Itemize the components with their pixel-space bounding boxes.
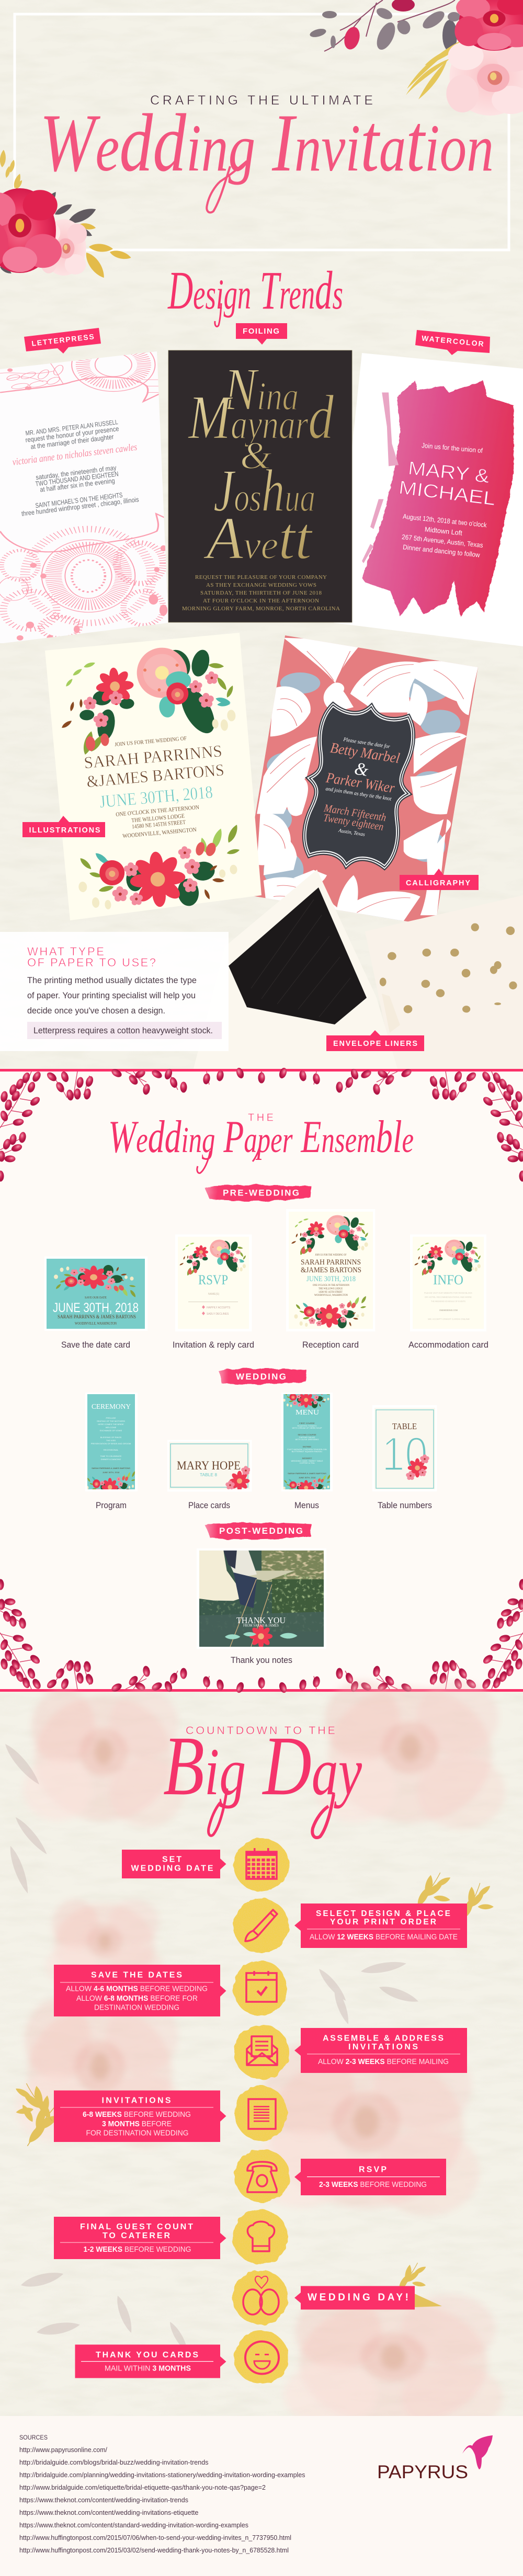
step 8: wedding day bbox=[232, 2270, 415, 2324]
card: accommodation: INFO bbox=[433, 1272, 463, 1287]
garland: top bbox=[0, 1067, 523, 1182]
icon: calendar bbox=[246, 1848, 277, 1879]
step 5: invitations: FOR DESTINATION WEDDING bbox=[86, 2128, 188, 2138]
card: letterpress: TWO THOUSAND AND EIGHTEEN bbox=[35, 470, 119, 488]
title: wedding invitation: Wedding Invitation bbox=[40, 97, 494, 189]
card: watercolor bbox=[334, 353, 523, 646]
label: illustrations bbox=[22, 816, 105, 837]
card: program: PRESENTATION OF BRIDE AND GROOM bbox=[91, 1442, 131, 1445]
badge: wedding: WEDDING bbox=[236, 1372, 286, 1382]
captions: wedding: Place cards bbox=[188, 1500, 230, 1510]
step 2: select design bbox=[233, 1898, 467, 1953]
panel heading bbox=[27, 945, 156, 969]
card: save the date: JUNE 30TH, 2018 bbox=[53, 1301, 139, 1315]
card: reception: SARAH PARRINNS bbox=[301, 1258, 361, 1267]
card: illustrations: WOODINVILLE, WASHINGTON bbox=[122, 827, 197, 839]
card: save the date: WOODINVILLE, WASHINGTON bbox=[75, 1321, 117, 1326]
card: program bbox=[85, 1393, 138, 1497]
card: program: CEREMONY bbox=[92, 1403, 131, 1411]
captions: pre-wedding: Save the date card bbox=[61, 1340, 130, 1350]
card: reception: 14580 NE 145TH STREET bbox=[319, 1291, 343, 1294]
garland: bottom bbox=[0, 1579, 523, 1694]
caption: thank you notes: Thank you notes bbox=[231, 1655, 292, 1665]
card: invitation and reply: SADLY DECLINES bbox=[207, 1313, 229, 1316]
card: letterpress: three hundred winthrop street , chicago, illinois bbox=[21, 495, 140, 518]
heading: the: THE bbox=[248, 1112, 274, 1123]
card: letterpress: at half after six in the evening bbox=[40, 476, 115, 494]
heading: wedding paper ensemble: Wedding Paper Ensemble bbox=[108, 1112, 414, 1162]
card: program: BLESSING OF RINGS bbox=[100, 1436, 122, 1439]
icon: chef hat bbox=[247, 2221, 275, 2251]
card: foiling: AT FOUR O'CLOCK IN THE AFTERNOON bbox=[203, 598, 319, 604]
card: watercolor: MICHAEL bbox=[397, 476, 497, 509]
card: menus bbox=[281, 1386, 333, 1496]
card: accommodation: ONEWEDDING.COM bbox=[439, 1309, 458, 1312]
card: watercolor: August 12th, 2018 at two o'clock bbox=[403, 512, 487, 529]
step 7: final guest count bbox=[54, 2210, 288, 2264]
step 6: rsvp: 2-3 WEEKS BEFORE WEDDING bbox=[319, 2180, 427, 2189]
card: reception: JUNE 30TH, 2018 bbox=[306, 1275, 356, 1283]
step 2: select design: SELECT DESIGN & PLACE bbox=[316, 1909, 450, 1918]
card: thank you photo: THANK YOU bbox=[236, 1615, 286, 1625]
panel body text: of paper. Your printing specialist will help you bbox=[27, 990, 196, 1000]
card: menus: WITH CREAM OF HERB SOUP bbox=[292, 1427, 322, 1429]
card: reception: WOODINVILLE, WASHINGTON bbox=[314, 1294, 348, 1297]
card: watercolor: Dinner and dancing to follow bbox=[403, 543, 481, 559]
card: calligraphy bbox=[242, 635, 478, 929]
small heading: crafting the ultimate: CRAFTING THE ULTIMATE bbox=[150, 93, 373, 108]
sources list: http://bridalguide.com/planning/wedding-invitations-stationery/wedding-invitation-wording-examples bbox=[19, 2471, 305, 2479]
step 9: thank you cards: THANK YOU CARDS bbox=[96, 2351, 198, 2360]
card: table numbers bbox=[372, 1405, 437, 1491]
heading: design trends: Design Trends bbox=[167, 260, 343, 321]
card: reception: &JAMES BARTONS bbox=[301, 1266, 361, 1274]
captions: wedding: Menus bbox=[294, 1500, 319, 1510]
step 3: save the dates bbox=[54, 1961, 287, 2016]
panel callout bbox=[27, 1022, 222, 1039]
card: save the date: SAVE OUR DATE bbox=[85, 1296, 107, 1300]
icon: document bbox=[248, 2099, 276, 2129]
card: program: SARAH PARRINNS & JAMES BARTONS bbox=[92, 1467, 130, 1469]
header frame bbox=[15, 14, 509, 250]
icon: telephone bbox=[247, 2162, 277, 2192]
card: foiling: SATURDAY, THE THIRTIETH OF JUNE 2018 bbox=[200, 590, 322, 596]
captions: pre-wedding: Invitation & reply card bbox=[173, 1340, 254, 1350]
step 3: save the dates: SAVE THE DATES bbox=[91, 1970, 182, 1980]
captions: pre-wedding bbox=[61, 1340, 488, 1350]
logo: papyrus: PAPYRUS bbox=[377, 2462, 468, 2482]
card: menus: WEDDING CAKE, SWEET TABLE bbox=[291, 1460, 323, 1462]
card: menus: CAESAR SALAD bbox=[299, 1436, 315, 1439]
card: foiling: Maynard bbox=[187, 382, 334, 452]
card: program: JUNE 30TH, 2018 bbox=[103, 1471, 120, 1474]
card: reception: JOIN US FOR THE WEDDING OF bbox=[315, 1254, 347, 1257]
card: place cards: MARY HOPE bbox=[177, 1459, 241, 1472]
card: invitation and reply bbox=[175, 1234, 252, 1331]
label: letterpress: LETTERPRESS bbox=[31, 332, 95, 348]
card: letterpress: MR. AND MRS. PETER ALAN RUSSELL bbox=[25, 418, 118, 437]
sources list: SOURCES bbox=[19, 2434, 48, 2441]
panel callout: Letterpress requires a cotton heavyweight stock. bbox=[33, 1025, 213, 1035]
card: calligraphy: Twenty eighteen bbox=[323, 811, 384, 833]
section: wedding paper ensemble bbox=[0, 1067, 523, 1694]
card: illustrations: JOIN US FOR THE WEDDING OF bbox=[115, 736, 187, 748]
card: menus: COFFEE & TEA bbox=[300, 1462, 315, 1464]
step 9: thank you cards: MAIL WITHIN 3 MONTHS bbox=[105, 2364, 191, 2373]
panel body text: decide once you've chosen a design. bbox=[27, 1006, 165, 1016]
card: letterpress: at the marriage of their daughter bbox=[30, 432, 115, 451]
card: program: EXCHANGE OF VOWS bbox=[100, 1429, 122, 1432]
card: invitation and reply: HAPPILY ACCEPTS bbox=[207, 1306, 231, 1309]
card: calligraphy: and join them as they tie the knot bbox=[325, 786, 392, 802]
sources list: https://www.theknot.com/content/standard-wedding-invitation-wording-examples bbox=[19, 2522, 248, 2529]
step 1: set wedding date bbox=[122, 1838, 289, 1891]
step 7: final guest count: 1-2 WEEKS BEFORE WEDDING bbox=[84, 2245, 191, 2254]
card: accommodation bbox=[410, 1234, 486, 1331]
card: illustrations bbox=[45, 633, 262, 920]
label: calligraphy: CALLIGRAPHY bbox=[406, 879, 470, 887]
captions: pre-wedding: Accommodation card bbox=[408, 1340, 488, 1350]
card: calligraphy: Parker Wiker bbox=[324, 770, 396, 796]
card: letterpress: saturday, the nineteenth of may bbox=[36, 464, 117, 481]
card: program: WELCOME bbox=[106, 1426, 117, 1429]
card: invitation and reply: NAME(S) bbox=[208, 1293, 219, 1296]
card: accommodation: THE WEEKEND SCHEDULE OF EVENTS bbox=[431, 1300, 465, 1303]
card: calligraphy: Betty Marbel bbox=[329, 740, 401, 767]
card: menus: SARAH PARRINNS & JAMES BARTONS bbox=[288, 1472, 326, 1475]
card: letterpress: request the honour of your presence bbox=[25, 425, 119, 444]
panel body text bbox=[27, 975, 197, 1016]
icon: smiley bbox=[245, 2342, 279, 2374]
badge: pre-wedding bbox=[205, 1185, 312, 1201]
captions: wedding: Table numbers bbox=[378, 1500, 432, 1510]
captions: wedding: Program bbox=[96, 1500, 127, 1510]
card: accommodation: PLEASE VISIT OUR WEBSITE FOR ROOM BLOCK bbox=[424, 1292, 472, 1294]
step 4: assemble and address: ALLOW 2-3 WEEKS BEFORE MAILING bbox=[318, 2057, 449, 2066]
card: watercolor: MARY & bbox=[407, 457, 491, 487]
gold sprigs bbox=[13, 1873, 496, 2307]
card: accommodation: OR HOTEL RECOMMENDATIONS AND MORE bbox=[425, 1296, 472, 1298]
label: illustrations: ILLUSTRATIONS bbox=[29, 826, 100, 835]
card: save the date: SARAH PARRINNS & JAMES BARTONS bbox=[58, 1315, 136, 1320]
card: menus: MENU bbox=[295, 1409, 319, 1417]
card: thank you photo bbox=[197, 1548, 326, 1649]
card: illustrations: JUNE 30TH, 2018 bbox=[99, 783, 213, 812]
icon: envelope bbox=[247, 2036, 277, 2065]
sources list: http://www.papyrusonline.com/ bbox=[19, 2446, 108, 2454]
badge: wedding bbox=[219, 1369, 307, 1385]
step 1: set wedding date: SET bbox=[162, 1855, 181, 1864]
step 7: final guest count: FINAL GUEST COUNT bbox=[80, 2222, 193, 2231]
badge: post-wedding bbox=[205, 1523, 312, 1540]
card: program: SEATING OF THE MOTHERS bbox=[97, 1420, 125, 1422]
card: accommodation: WE ACCEPT CREDIT CARDS ONLINE bbox=[428, 1318, 470, 1320]
step 4: assemble and address: INVITATIONS bbox=[348, 2043, 418, 2051]
sources list: http://bridalguide.com/blogs/bridal-buzz/wedding-invitation-trends bbox=[19, 2459, 208, 2466]
step 5: invitations: INVITATIONS bbox=[101, 2096, 171, 2105]
logo: papyrus bbox=[377, 2435, 493, 2482]
card: menus: BUTTERNUT SQUASH RAVIOLI bbox=[292, 1450, 322, 1453]
step 3: save the dates: DESTINATION WEDDING bbox=[94, 2003, 179, 2012]
label: watercolor: WATERCOLOR bbox=[422, 334, 484, 348]
card: foiling: Nina bbox=[223, 356, 299, 423]
sources list: http://www.huffingtonpost.com/2015/07/06/when-to-send-your-wedding-invites_n_7737950.html bbox=[19, 2534, 291, 2541]
card: program: TIME TO CELEBRATE bbox=[100, 1455, 122, 1457]
card: menus: ROASTED TOMATO bbox=[297, 1424, 317, 1427]
card: reception: THE WILLOWS LODGE bbox=[319, 1287, 343, 1291]
card: menus: WITH OLIVE DRESSING bbox=[295, 1438, 319, 1441]
card: invitation and reply: RSVP bbox=[198, 1272, 228, 1287]
card: reception bbox=[286, 1209, 376, 1331]
sources list: https://www.theknot.com/content/wedding-invitations-etiquette bbox=[19, 2509, 199, 2516]
card: calligraphy: Please save the date for bbox=[343, 737, 391, 750]
card: calligraphy: March Fifteenth bbox=[323, 802, 387, 824]
step 3: save the dates: ALLOW 6-8 MONTHS BEFORE FOR bbox=[76, 1994, 198, 2003]
step 5: invitations: 3 MONTHS BEFORE bbox=[102, 2119, 172, 2128]
card: save the date bbox=[44, 1256, 147, 1331]
card: program: DINNER & DANCING bbox=[101, 1458, 121, 1461]
label: envelope liners bbox=[326, 1030, 424, 1051]
step 5: invitations: 6-8 WEEKS BEFORE WEDDING bbox=[83, 2110, 191, 2119]
card: reception: ONE O'CLOCK IN THE AFTERNOON bbox=[313, 1284, 349, 1287]
sources list bbox=[19, 2434, 305, 2554]
icon: calendar check bbox=[246, 1971, 277, 2002]
card: program: THE KISS bbox=[106, 1439, 116, 1442]
card: foiling bbox=[168, 350, 352, 622]
step 1: set wedding date: WEDDING DATE bbox=[131, 1864, 213, 1873]
step 9: thank you cards bbox=[75, 2331, 289, 2384]
badge: post-wedding: POST-WEDDING bbox=[219, 1526, 303, 1536]
card: menus: SECOND COURSE bbox=[298, 1433, 316, 1436]
step 7: final guest count: TO CATERER bbox=[103, 2231, 170, 2240]
card: foiling: REQUEST THE PLEASURE OF YOUR COMPANY bbox=[195, 574, 327, 580]
card: foiling: & bbox=[240, 435, 272, 477]
heading: countdown to the: COUNTDOWN TO THE bbox=[186, 1724, 335, 1737]
card: menus: FILET MIGNON, CHICKEN TENDERLOIN bbox=[287, 1448, 327, 1451]
label: envelope liners: ENVELOPE LINERS bbox=[333, 1040, 417, 1048]
panel heading: OF PAPER TO USE? bbox=[27, 956, 156, 969]
card: menus: DESSERT bbox=[302, 1457, 312, 1460]
panel heading: WHAT TYPE bbox=[27, 945, 104, 958]
label: foiling bbox=[236, 323, 287, 345]
icon: rings and hearts bbox=[243, 2276, 279, 2315]
card: letterpress: victoria anne to nicholas steven cawles bbox=[12, 441, 138, 468]
panel: paper advice bbox=[0, 932, 229, 1051]
card: table numbers: TABLE bbox=[392, 1421, 417, 1431]
step 5: invitations bbox=[54, 2085, 287, 2142]
label: watercolor bbox=[415, 330, 490, 355]
card: table numbers: 10 bbox=[382, 1428, 428, 1481]
card: place cards: TABLE 8 bbox=[200, 1473, 218, 1477]
floral cluster: left bbox=[0, 150, 132, 281]
step 8: wedding day: WEDDING DAY! bbox=[308, 2292, 408, 2303]
icon: paintbrush bbox=[245, 1910, 277, 1941]
footer panel bbox=[0, 2416, 523, 2576]
envelope liners photo bbox=[194, 870, 523, 1069]
card: watercolor: Join us for the union of bbox=[422, 441, 483, 454]
step 4: assemble and address bbox=[234, 2025, 467, 2079]
card: program: PRELUDE bbox=[106, 1417, 116, 1419]
card: watercolor: 267 5th Avenue, Austin, Texas bbox=[402, 533, 484, 549]
card: watercolor: Midtown Loft bbox=[424, 525, 463, 537]
label: calligraphy bbox=[400, 869, 479, 890]
captions: wedding bbox=[96, 1500, 432, 1510]
card: letterpress: SAINT MICHAEL'S ON THE HEIGHTS bbox=[35, 491, 123, 509]
step 4: assemble and address: ASSEMBLE & ADDRESS bbox=[323, 2034, 444, 2043]
card: calligraphy: & bbox=[353, 759, 370, 780]
card: illustrations: THE WILLOWS LODGE bbox=[131, 813, 185, 824]
step 2: select design: YOUR PRINT ORDER bbox=[330, 1918, 436, 1927]
label: foiling: FOILING bbox=[243, 327, 279, 336]
card: illustrations: &JAMES BARTONS bbox=[86, 760, 225, 791]
card: foiling: MORNING GLORY FARM, MONROE, NORTH CAROLINA bbox=[182, 606, 340, 612]
badge: pre-wedding: PRE-WEDDING bbox=[223, 1188, 299, 1198]
card: thank you photo: FROM SARAH & JAMES bbox=[243, 1623, 279, 1627]
card: illustrations: SARAH PARRINNS bbox=[83, 741, 223, 772]
card: place cards bbox=[167, 1440, 252, 1491]
panel body text: The printing method usually dictates the type bbox=[27, 975, 197, 985]
card: foiling: Joshua bbox=[213, 458, 315, 524]
card: menus: ENTREE bbox=[303, 1445, 311, 1448]
title: big day: Big Day bbox=[163, 1719, 362, 1813]
card: foiling: AS THEY EXCHANGE WEDDING VOWS bbox=[206, 582, 316, 588]
step 2: select design: ALLOW 12 WEEKS BEFORE MAILING DATE bbox=[310, 1933, 458, 1941]
card: menus: JUNE 30TH, 2018 bbox=[299, 1476, 316, 1479]
sources list: http://www.bridalguide.com/etiquette/bridal-etiquette-qas/thank-you-note-qas?page=2 bbox=[19, 2484, 266, 2491]
card: letterpress bbox=[0, 338, 168, 643]
sources list: https://www.theknot.com/content/wedding-invitation-trends bbox=[19, 2497, 188, 2504]
sources list: http://www.huffingtonpost.com/2015/03/02/send-wedding-thank-you-notes-by_n_6785528.html bbox=[19, 2547, 289, 2554]
step 3: save the dates: ALLOW 4-6 MONTHS BEFORE WEDDING bbox=[66, 1984, 208, 1993]
floral cluster: top right bbox=[309, 0, 523, 116]
captions: pre-wedding: Reception card bbox=[302, 1340, 359, 1350]
card: program: RECESSIONAL bbox=[104, 1449, 119, 1451]
card: illustrations: 14580 NE 145TH STREET bbox=[132, 819, 186, 830]
step 6: rsvp: RSVP bbox=[359, 2165, 386, 2174]
card: menus: FIRST COURSE bbox=[299, 1422, 315, 1424]
card: program: HERE COMES THE BRIDE bbox=[98, 1423, 124, 1426]
card: calligraphy: Austin, Texas bbox=[337, 828, 366, 838]
label: letterpress bbox=[24, 328, 101, 354]
card: foiling: Avett bbox=[203, 505, 313, 572]
watermark florals bbox=[2, 1680, 505, 2432]
card: illustrations: ONE O'CLOCK IN THE AFTERNOON bbox=[116, 804, 199, 818]
step 6: rsvp bbox=[234, 2149, 446, 2203]
